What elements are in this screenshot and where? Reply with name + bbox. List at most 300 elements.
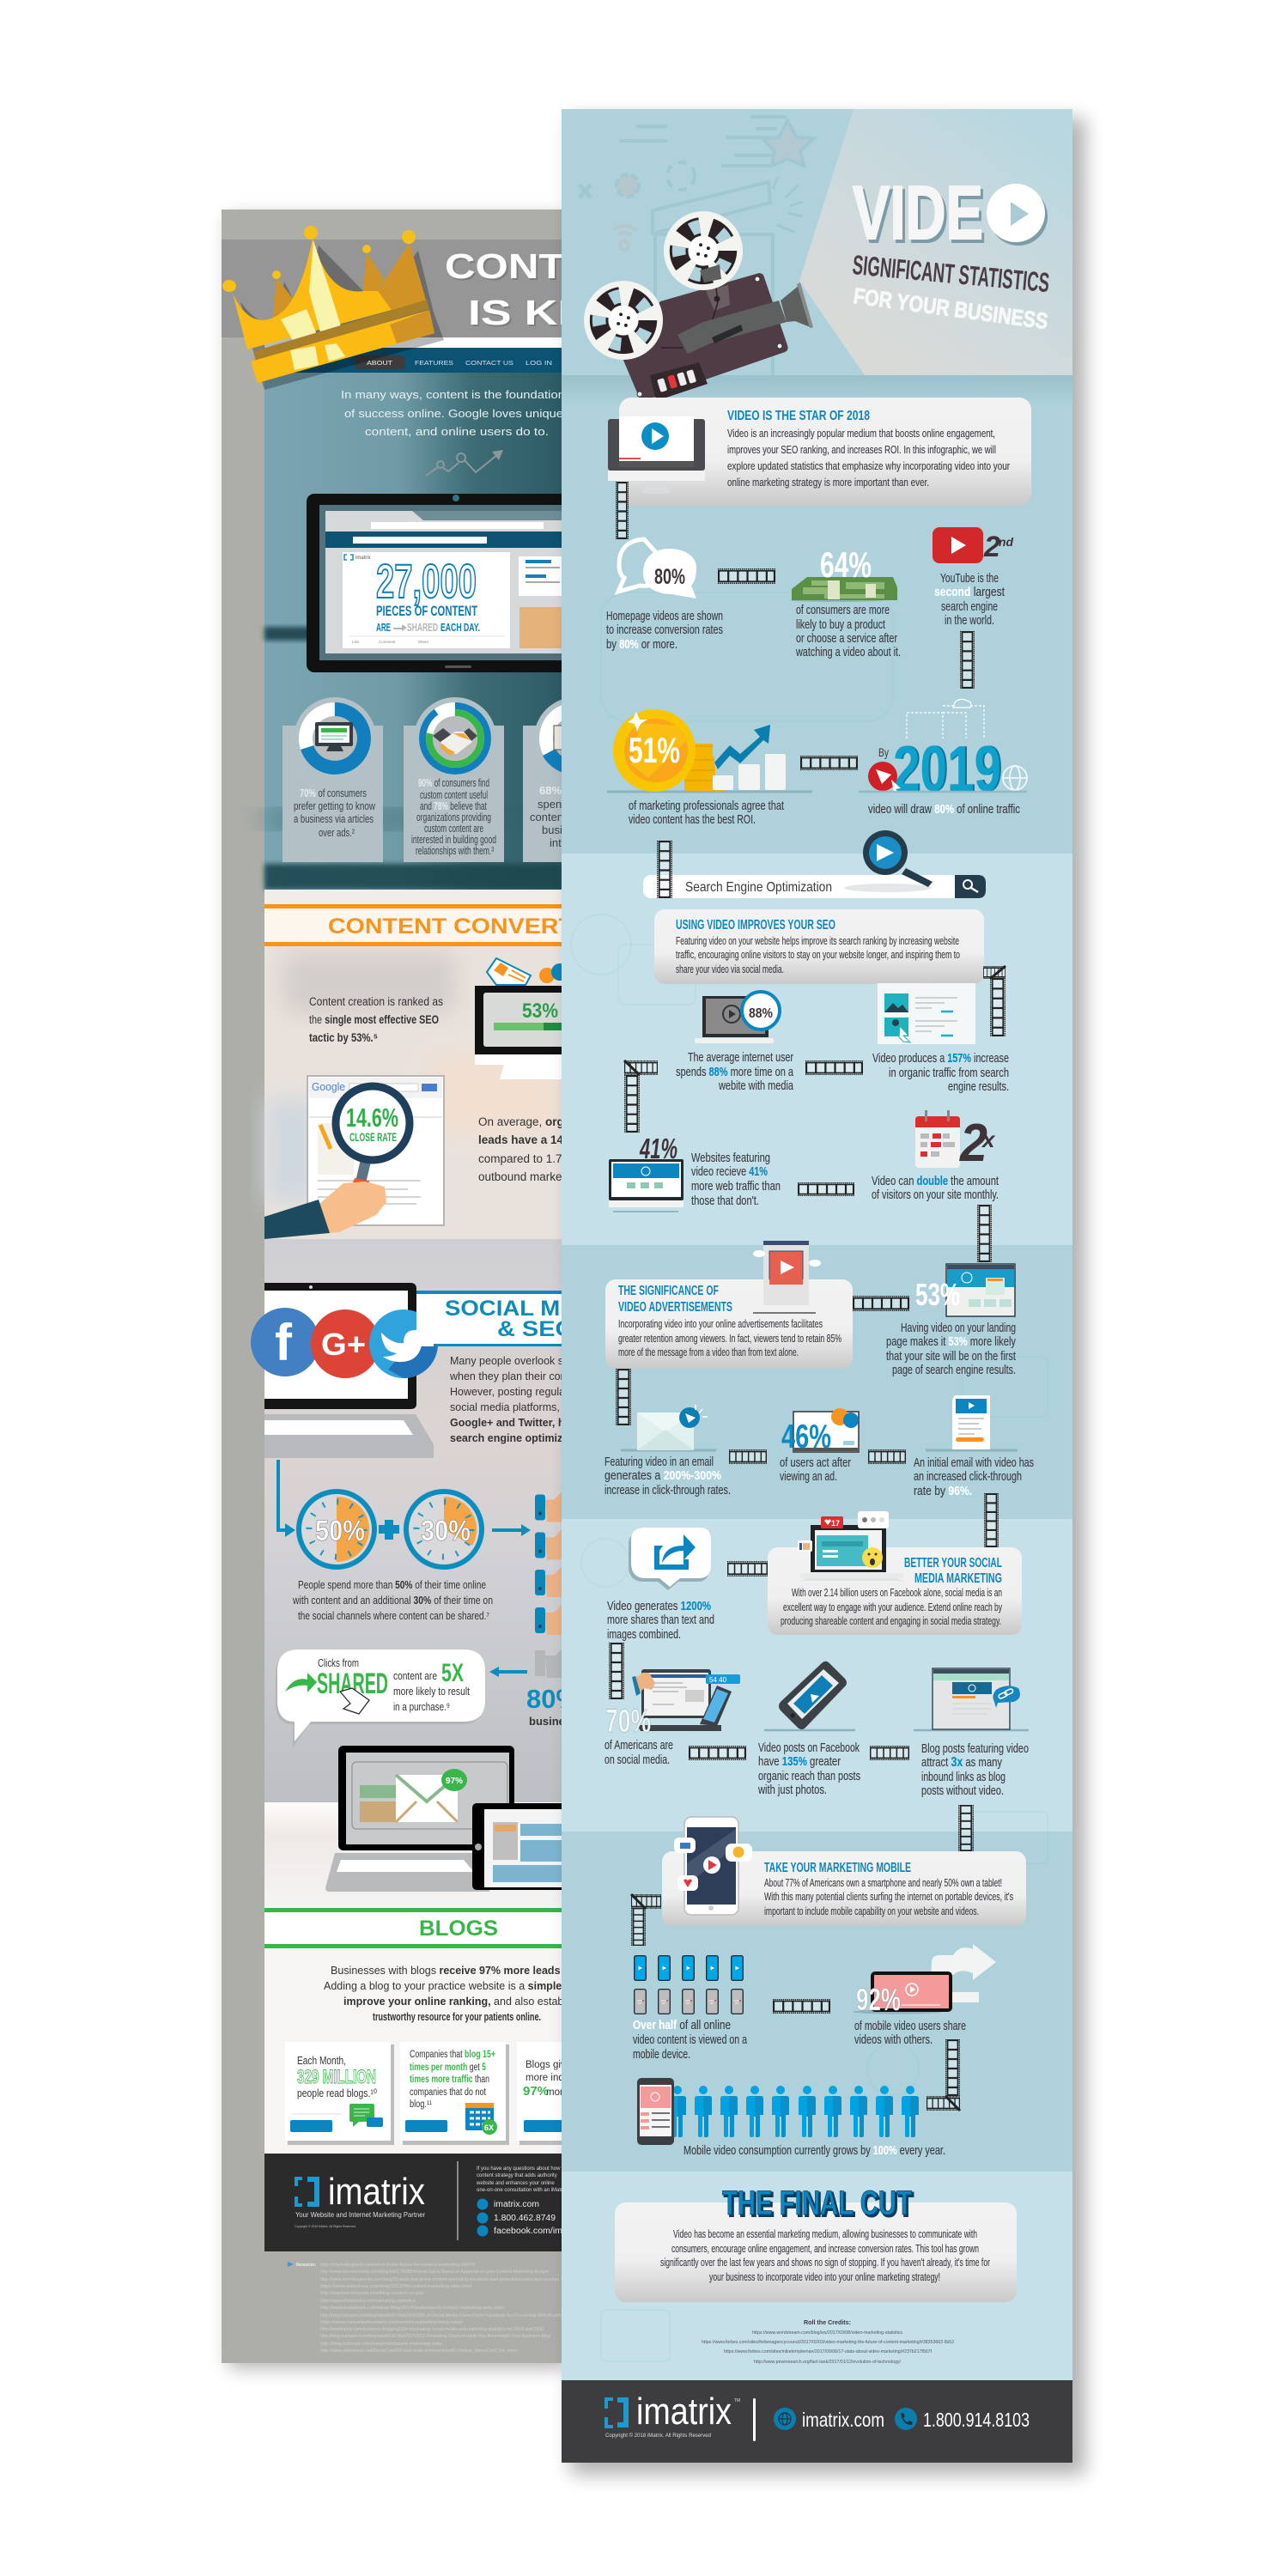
card: 27,000 pieces of content: SHARED xyxy=(407,621,438,634)
stat: 1200% more shares xyxy=(607,1528,714,1642)
resources list: http://blog.hubspot.com/insiders/inbound-marketing-stats xyxy=(320,2342,442,2347)
chart icon: coin, stacks, arrow and bars: 51% xyxy=(629,730,680,770)
stat: 51% best ROI xyxy=(607,709,812,827)
stat: homepage videos 80%: Homepage videos are shown xyxy=(606,610,723,623)
section: blogs xyxy=(264,1908,642,2154)
title: VIDEO: VIDE xyxy=(855,173,986,258)
callout: shared content 5X: in a purchase.⁹ xyxy=(393,1701,450,1713)
stat: over half mobile: video content is viewed on a xyxy=(633,2033,748,2047)
icon: web document xyxy=(878,983,975,1044)
stat: 135% organic reach: with just photos. xyxy=(757,1783,827,1797)
icon: calendar 2x: 2 xyxy=(959,1114,987,1173)
box: the final cut conclusion: consumers, encourage online engagement, and increase conversion rates. This tool has grown xyxy=(671,2243,979,2255)
icon: tablet xyxy=(637,2078,674,2145)
logo: imatrix: imatrix xyxy=(636,2391,732,2433)
stat: 135% organic reach: have 135% greater xyxy=(758,1755,841,1769)
stat: 135% organic reach xyxy=(757,1662,860,1797)
text: social media overview: when they plan their content. xyxy=(449,1370,587,1382)
text: SEO tactic xyxy=(309,995,443,1044)
arrow: from 80% thumb xyxy=(489,1667,527,1677)
title: content is king: IS KING xyxy=(468,293,640,332)
monitor: 53% progress xyxy=(475,986,569,1079)
film strip xyxy=(985,1493,998,1547)
stat: 92% share videos xyxy=(853,1944,996,2047)
heading: social media and SEO: SOCIAL MEDIA xyxy=(445,1297,617,1321)
white strip under header xyxy=(264,337,562,348)
icon: youtube 2nd xyxy=(933,527,1014,563)
text: contact prompt: If you have any questions about how xyxy=(477,2166,561,2172)
stat: by 2019 video traffic xyxy=(859,699,1027,817)
text: contact prompt xyxy=(476,2166,566,2193)
chart icon: coin, stacks, arrow and bars xyxy=(607,709,812,792)
title: content is king: CONTENT xyxy=(447,248,651,288)
film strip xyxy=(689,1747,746,1759)
resources list: http://marketingland.com/what-is-the-future-for-content-marketing-59074 xyxy=(320,2263,475,2268)
box: video is the star of 2018: VIDEO IS THE STAR OF 2018 xyxy=(727,409,870,423)
stat: by 2019 video traffic: video will draw 80% of online traffic xyxy=(868,803,1020,817)
film strip xyxy=(610,1643,623,1699)
film strip xyxy=(868,1450,906,1463)
contact list: facebook.com/imatrix xyxy=(494,2227,580,2236)
text: 50% and 30% of time: the social channels where content can be shared.⁷ xyxy=(298,1610,489,1622)
stat: 64% of consumers: 64% xyxy=(820,544,872,585)
arrow: to thumbs xyxy=(492,1524,531,1536)
icon: monitor with 41%: 41% xyxy=(639,1133,677,1164)
card: 27,000 pieces of content: EACH DAY. xyxy=(440,621,480,634)
stat: 157% organic traffic: in organic traffic from search xyxy=(889,1066,1009,1080)
contact list: 1.800.462.8749 xyxy=(494,2214,556,2223)
tile: 90% of consumers: interested in building good xyxy=(411,833,496,846)
stat: 53% landing page: Having video on your landing xyxy=(901,1321,1016,1335)
stat: 1200% more shares: Video generates 1200% xyxy=(607,1600,711,1613)
stat: homepage videos 80%: by 80% or more. xyxy=(606,638,677,652)
box: the final cut conclusion xyxy=(615,2202,1017,2302)
intro text: content, and online users do to. xyxy=(365,426,549,438)
icon: google plus: G+ xyxy=(321,1327,366,1362)
box: using video improves your SEO: share your video via social media. xyxy=(676,963,784,975)
icon: billboard with play xyxy=(753,1241,821,1313)
box: the significance of video advertisements: THE SIGNIFICANCE OF xyxy=(618,1284,719,1298)
stat: 41% more traffic: those that don't. xyxy=(691,1194,759,1208)
stat: 70% of americans: on social media. xyxy=(605,1753,670,1767)
text: contact prompt: one-on-one consultation with an iMatrix xyxy=(477,2188,566,2193)
box: video is the star of 2018: Video is an increasingly popular medium that boosts online engagement, xyxy=(727,428,995,440)
stat: youtube second largest xyxy=(933,527,1014,628)
box: better your social media marketing: excellent way to engage with your audience. Extend online reach by xyxy=(783,1601,1003,1613)
google search result with magnifier: 14.6% xyxy=(346,1103,398,1133)
film strip corner xyxy=(631,1894,661,1946)
credits list: Roll the Credits: xyxy=(804,2320,851,2326)
stat: 3x inbound links: attract 3x as many xyxy=(921,1755,1003,1770)
chart: 30% clock xyxy=(406,1492,482,1567)
contact list: imatrix.com xyxy=(494,2200,539,2209)
resources list: http://www.smartbugmedia.com/blog/26-stats-that-prove-content-marketing-increases-lead-generation-sales-and-revenue xyxy=(320,2277,559,2282)
icon: hand and sleeve xyxy=(264,1182,386,1239)
google search result with magnifier xyxy=(264,1076,444,1239)
film strip xyxy=(729,1450,767,1463)
stat: 46% act after ad: of users act after xyxy=(780,1456,851,1470)
stat: youtube second largest: in the world. xyxy=(945,614,994,628)
stat: 80% business xyxy=(526,1684,580,1728)
icon: browser with link bubble xyxy=(914,1668,1029,1730)
logo: imatrix: Copyright © 2018 iMatrix. All Rights Reserved xyxy=(605,2433,711,2439)
heading: the final cut: THE FINAL CUT xyxy=(724,2186,914,2224)
google search result with magnifier: CLOSE RATE xyxy=(349,1130,397,1144)
tile: 70% of consumers: 70% of consumers xyxy=(300,787,367,799)
section backgrounds xyxy=(562,109,1072,2380)
card: 329 million: people read blogs.¹⁰ xyxy=(297,2087,377,2099)
stat: mobile consumption growth xyxy=(637,2078,945,2158)
card: 329 million xyxy=(285,2042,394,2145)
section: white lower background xyxy=(264,1802,562,1910)
box: using video improves your SEO: USING VIDEO IMPROVES YOUR SEO xyxy=(676,918,835,933)
stat: 51% best ROI: video content has the best ROI. xyxy=(629,813,756,827)
film strip corner xyxy=(983,966,1005,1036)
shadow of video panel xyxy=(570,118,1085,2475)
box: using video improves your SEO: Featuring video on your website helps improve its search ranking by increasing website xyxy=(676,935,959,947)
chart: 30% clock: 30% xyxy=(421,1515,471,1547)
box: better your social media marketing xyxy=(768,1511,1022,1635)
tile: 90% of consumers: relationships with them.³ xyxy=(416,844,494,857)
laptop with social icons xyxy=(251,1283,438,1458)
tile: 68% of consumers: 68% of xyxy=(539,784,574,797)
box: the significance of video advertisements: greater retention among viewers. In fact, viewers tend to retain 85% xyxy=(618,1333,841,1345)
icon: laptop with 88% timer: 88% xyxy=(749,1006,773,1021)
intro text: of success online. Google loves unique xyxy=(344,408,563,420)
resources list: http://www.hubspot.com/marketing-statistics xyxy=(320,2299,416,2304)
stat: over half mobile: mobile device. xyxy=(633,2048,690,2062)
icon: landing page screen xyxy=(946,1264,1015,1316)
resources list: Resources: xyxy=(296,2263,316,2268)
stat: over half mobile xyxy=(633,1956,748,2062)
text: SEO tactic: the single most effective SEO xyxy=(309,1013,439,1026)
chart: 50% clock xyxy=(299,1492,374,1567)
pictogram: phones xyxy=(635,1956,743,2014)
callout: shared content 5X: Clicks from xyxy=(318,1656,359,1669)
stat: double visitors xyxy=(872,1110,999,1202)
box: the final cut conclusion: Video has become an essential marketing medium, allowing businesses to communicate with xyxy=(673,2228,977,2240)
stat: 80% business: 80% xyxy=(526,1684,580,1714)
icon: laptop, phone and thumb: 70% xyxy=(605,1704,651,1740)
box: video is the star of 2018: improves your SEO ranking, and increases ROI. In this infographic, we will xyxy=(727,444,996,456)
card: 27,000 pieces of content: ARE xyxy=(376,621,391,634)
stat: 1200% more shares: more shares than text and xyxy=(607,1613,714,1627)
monitor with 27,000 statistic xyxy=(307,494,581,672)
credits list: http://www.pewresearch.org/fact-tank/2017/01/12/evolution-of-technology/ xyxy=(754,2360,901,2365)
box: take your marketing mobile: About 77% of Americans own a smartphone and nearly 50% own a tablet! xyxy=(764,1877,1002,1889)
title: content is king: IS KING xyxy=(470,295,641,334)
stat: 46% act after ad: viewing an ad. xyxy=(780,1470,837,1484)
box: better your social media marketing: MEDIA MARKETING xyxy=(914,1571,1002,1586)
icon: envelope with play xyxy=(621,1405,716,1450)
text: contact prompt: website and enhances your online xyxy=(476,2181,555,2186)
heading: content converts: CONTENT CONVERTS xyxy=(328,914,590,939)
film strip xyxy=(718,569,775,583)
intro text: In many ways, content is the foundation xyxy=(341,389,565,401)
stat: by 2019 video traffic: By xyxy=(878,745,889,759)
stat: email click-through: increase in click-through rates. xyxy=(605,1484,731,1498)
text: 50% and 30% of time: with content and an additional 30% of their time on xyxy=(292,1595,493,1607)
navigation bar: CONTACT US xyxy=(465,361,513,367)
icon: share bubble xyxy=(629,1528,711,1590)
film strip xyxy=(959,1805,973,1851)
navigation bar: ABOUT xyxy=(367,361,393,367)
stat: mobile consumption growth: Mobile video consumption currently grows by 100% every year. xyxy=(683,2144,945,2158)
film strip corner xyxy=(927,2039,960,2111)
box: the significance of video advertisements xyxy=(605,1279,853,1369)
card: 329 million: 329 MILLION xyxy=(297,2066,376,2087)
icon: laptop with social reactions xyxy=(798,1511,903,1581)
card: blogs indexed: more index xyxy=(526,2073,574,2083)
box: the significance of video advertisements: Incorporating video into your online advertisements facilitates xyxy=(618,1318,823,1330)
credits list: https://www.wordstream.com/blog/ws/2017/03/08/video-marketing-statistics xyxy=(752,2330,902,2336)
stat: 41% more traffic xyxy=(609,1133,781,1212)
text: blogs overview: Businesses with blogs receive 97% more leads than those with xyxy=(331,1965,642,1977)
resources list: http://www.slideshare.net/NewsCred/50-best-stats-presentation/61-Follow_NewsCred_for_more xyxy=(320,2348,518,2354)
monitor: 53% progress: 53% xyxy=(522,999,558,1023)
icon: rising line chart xyxy=(426,450,503,476)
stat: 1200% more shares: images combined. xyxy=(607,1628,681,1642)
stat: 41% more traffic: video recieve 41% xyxy=(691,1165,768,1179)
box: video is the star of 2018 xyxy=(608,398,1031,506)
panel: video significant statistics infographic xyxy=(562,109,1072,2463)
icon: screen with chat bubbles: 46% xyxy=(781,1419,831,1455)
network diagram xyxy=(907,699,984,738)
film strip xyxy=(961,631,974,689)
text: social media overview xyxy=(449,1355,629,1444)
stat: 80% business: business xyxy=(529,1715,577,1728)
stat: 88% more time: The average internet user xyxy=(688,1051,793,1065)
icon: phone with share arrow: 92% xyxy=(856,1982,901,2017)
stat: email click-through xyxy=(605,1405,731,1498)
logo: imatrix: TM xyxy=(734,2398,740,2403)
stat: youtube second largest: second largest xyxy=(934,586,1005,599)
box: the final cut conclusion: your business to incorporate video into your online marketing strategy! xyxy=(709,2271,940,2283)
stat: by 2019 video traffic: 2019 xyxy=(895,732,1003,805)
stat: 92% share videos: of mobile video users share xyxy=(854,2020,966,2033)
icon: plus xyxy=(379,1520,399,1540)
callout: shared content 5X: more likely to result xyxy=(393,1686,470,1698)
box: video is the star of 2018: online marketing strategy is more important than ever. xyxy=(727,477,929,489)
stat: by 2019 video traffic: 2019 xyxy=(893,732,1001,805)
heading: social media and SEO: & SEO xyxy=(497,1317,574,1341)
icon: twitter xyxy=(369,1309,438,1378)
film strip xyxy=(773,2000,830,2013)
film strip xyxy=(798,1183,854,1195)
text: social media overview: However, posting regularly on xyxy=(450,1386,592,1398)
icon: facebook: f xyxy=(275,1314,293,1371)
stat: 53% landing page xyxy=(886,1264,1017,1377)
resources list: http://blog.hubspot.com/blog/tabid/6307/bid/25609/80-of-Social-Media-Users-Prefer-Facebook-for-Connecting-With-Brands xyxy=(320,2313,562,2318)
text: blogs overview: Adding a blog to your practice website is a simple and effective xyxy=(324,1980,630,1992)
box: better your social media marketing: BETTER YOUR SOCIAL xyxy=(904,1556,1002,1571)
film strip xyxy=(727,1562,768,1576)
faint background icons xyxy=(571,117,1048,2361)
film strip xyxy=(853,1297,909,1310)
footer: content panel xyxy=(264,2154,580,2251)
icon: calendar 2x xyxy=(915,1110,996,1173)
text: organic leads close rate: compared to 1.7% xyxy=(478,1152,573,1165)
google search result with magnifier: Google xyxy=(312,1080,345,1093)
icon: facebook xyxy=(251,1308,319,1376)
tile: 70% of consumers: a business via articles xyxy=(294,812,374,825)
title: VIDEO: VIDE xyxy=(853,170,983,255)
text: social media overview: Many people overlook social media xyxy=(450,1355,617,1367)
title: content is king xyxy=(445,246,651,334)
icon: play circle xyxy=(987,184,1048,246)
text: contact prompt: content strategy that adds authority xyxy=(477,2173,557,2178)
subtitle: significant statistics: SIGNIFICANT STATISTICS xyxy=(851,249,1051,298)
tile: 68% of consumers: content from xyxy=(530,811,592,823)
tile: 68% of consumers xyxy=(523,697,617,862)
tile: 90% of consumers: organizations providing xyxy=(416,811,491,823)
card: 27,000 pieces of content: Share xyxy=(418,640,429,644)
text: social media overview: social media platforms, including xyxy=(450,1401,605,1413)
resources list: https://www.salesforce.com/blog/2013/06/content-marketing-stats.html xyxy=(320,2284,471,2289)
box: using video improves your SEO: traffic, encouraging online visitors to stay on your website longer, and inspiring them to xyxy=(676,949,960,961)
stat: 64% of consumers: watching a video about it. xyxy=(795,646,901,659)
projector light beam xyxy=(799,109,1072,375)
stat: initial email 96% xyxy=(914,1395,1034,1498)
stat: 64% of consumers: likely to buy a product xyxy=(796,618,885,632)
stat: 70% of americans xyxy=(605,1669,740,1767)
stat: 46% act after ad xyxy=(780,1408,859,1484)
icon: tilted phone xyxy=(764,1662,855,1730)
subtitle: for your business: FOR YOUR BUSINESS xyxy=(852,283,1049,334)
stat: 3x inbound links: Blog posts featuring video xyxy=(921,1742,1029,1756)
stat: email click-through: Featuring video in an email xyxy=(605,1455,714,1469)
callout: shared content 5X: 5X xyxy=(441,1659,464,1687)
stat: email click-through: generates a 200%-300% xyxy=(605,1469,721,1483)
logo: imatrix: Your Website and Internet Marketing Partner xyxy=(295,2210,425,2219)
arrow: into clocks xyxy=(278,1460,295,1537)
stat: 41% more traffic: Websites featuring xyxy=(691,1151,770,1165)
text: SEO tactic: tactic by 53%.⁵ xyxy=(309,1031,378,1044)
teal photo background xyxy=(264,373,562,890)
stat: 157% organic traffic: engine results. xyxy=(948,1080,1009,1094)
callout: shared content 5X: content are xyxy=(393,1670,437,1682)
stat: 157% organic traffic: Video produces a 157% increase xyxy=(872,1052,1009,1066)
stat: initial email 96%: An initial email with video has xyxy=(914,1456,1034,1470)
box: take your marketing mobile: important to include mobile capability on your website and videos. xyxy=(764,1905,979,1917)
navigation bar: LOG IN xyxy=(526,361,552,367)
stat: 135% organic reach: Video posts on Facebook xyxy=(758,1741,860,1755)
stat: 88% more time xyxy=(676,992,794,1093)
tile: 70% of consumers: over ads.² xyxy=(319,826,355,839)
icon: phone with share arrow xyxy=(853,1944,996,2017)
stat: initial email 96%: an increased click-through xyxy=(914,1470,1022,1484)
film strip xyxy=(870,1747,909,1759)
stat: 53% landing page: page makes it 53% more likely xyxy=(886,1335,1017,1349)
footer: imatrix contact xyxy=(562,2380,1072,2463)
stat: 51% best ROI: of marketing professionals agree that xyxy=(629,799,784,813)
credits list: https://www.forbes.com/sites/miketempleman/2017/09/06/17-stats-about-video-marketing/#237b217f567f xyxy=(724,2349,932,2354)
card: 27,000 pieces of content: 27,000 xyxy=(376,554,477,608)
stat: 53% landing page: 53% xyxy=(915,1277,960,1312)
intro text xyxy=(341,389,565,438)
icon: money stack xyxy=(790,577,897,602)
heading: blogs: BLOGS xyxy=(419,1917,498,1941)
tile: 70% of consumers xyxy=(283,697,383,862)
box: video is the star of 2018: explore updated statistics that emphasize why incorporating video into your xyxy=(727,460,1010,472)
film strip xyxy=(805,1061,863,1074)
stat: double visitors: Video can double the amount xyxy=(872,1175,999,1188)
text: social media overview: search engine optimization. Plus xyxy=(450,1432,617,1444)
stat: homepage videos 80% xyxy=(606,539,723,652)
card: blogs indexed: more xyxy=(546,2087,568,2098)
box: better your social media marketing: producing shareable content and engaging in social media strategy. xyxy=(781,1615,1001,1627)
stat: 88% more time: spends 88% more time on a xyxy=(676,1066,794,1079)
resources list: http://www.brainshark.com/ideas-Blog/2014/September/6-content-marketing-stats.aspx xyxy=(320,2306,504,2311)
chart: 50% clock: 50% xyxy=(315,1515,365,1547)
title: content is king: CONTENT xyxy=(445,246,649,286)
film strip xyxy=(978,1205,991,1262)
stat: 88% more time: webite with media xyxy=(718,1079,794,1093)
resources list xyxy=(288,2262,562,2354)
icon: youtube 2nd: 2 xyxy=(983,531,1000,563)
logo: imatrix xyxy=(295,2171,425,2228)
icons: thumbs up xyxy=(535,1491,586,1678)
callout: shared content 5X: SHARED xyxy=(317,1668,388,1700)
pictogram: people xyxy=(669,2086,919,2137)
logo: imatrix xyxy=(605,2391,740,2439)
film strip corner xyxy=(624,1060,658,1133)
tablet xyxy=(472,1803,575,1890)
tile: 70% of consumers: prefer getting to know xyxy=(294,799,375,812)
box: the final cut conclusion: significantly over the last few years and shows no sign of stopping. If you haven't already, it's time for xyxy=(660,2257,990,2269)
panel: content is king infographic xyxy=(222,210,651,2368)
heading: social media and SEO xyxy=(416,1291,617,1346)
stat: 157% organic traffic xyxy=(872,983,1009,1094)
card: 27,000 pieces of content: PIECES OF CONTENT xyxy=(376,603,477,619)
film strip xyxy=(617,482,628,539)
stat: 64% of consumers xyxy=(790,544,901,659)
section: content converts xyxy=(264,890,590,1239)
stat: initial email 96%: rate by 96%. xyxy=(914,1485,972,1498)
tile: 90% of consumers: 90% of consumers find xyxy=(418,776,489,789)
resources list: http://www.sproutcontent.com/blog/bid/176938/How-to-Get-a-Stamp-of-Approval-on-your-Content-Marketing-Budget xyxy=(320,2269,549,2275)
film strip xyxy=(617,1369,630,1425)
logo: imatrix: imatrix xyxy=(328,2171,425,2213)
card: 329 million: Each Month, xyxy=(297,2054,346,2067)
stat: double visitors: of visitors on your site monthly. xyxy=(872,1188,999,1202)
icon: email document xyxy=(926,1395,1018,1450)
search bar: search engine optimization: Search Engine Optimization xyxy=(685,880,832,895)
icon: laptop with social reactions: 17 xyxy=(831,1519,840,1528)
card: blogs indexed xyxy=(517,2042,574,2145)
stat: 3x inbound links xyxy=(914,1668,1029,1798)
stat: 53% landing page: that your site will be on the first xyxy=(886,1350,1016,1364)
stat: 3x inbound links: posts without video. xyxy=(921,1784,1004,1798)
card: blogs indexed: 97% xyxy=(523,2084,549,2099)
text: social media overview: Google+ and Twitter, has a positive xyxy=(450,1417,629,1429)
card: blog 15+ times: blog.¹¹ xyxy=(410,2099,432,2110)
card: blog 15+ times: 6X xyxy=(484,2123,494,2132)
text: 50% and 30% of time: People spend more than 50% of their time online xyxy=(298,1579,486,1591)
icon: crown xyxy=(222,226,444,390)
tile: 90% of consumers: and 78% believe that xyxy=(420,799,487,812)
stat: 53% landing page: page of search engine results. xyxy=(892,1364,1016,1377)
callout: shared content 5X xyxy=(276,1649,485,1747)
box: the significance of video advertisements: more of the message from a video than from text alone. xyxy=(618,1346,799,1358)
contact list xyxy=(477,2198,580,2236)
stat: 64% of consumers: of consumers are more xyxy=(796,604,890,617)
card: blog 15+ times: times per month get 5 xyxy=(410,2063,486,2073)
stat: 41% more traffic: more web traffic than xyxy=(691,1180,781,1194)
heading: the final cut: THE FINAL CUT xyxy=(722,2184,912,2222)
text: organic leads close rate: On average, organic xyxy=(478,1115,587,1128)
icon: monitor with 41% xyxy=(609,1133,683,1212)
